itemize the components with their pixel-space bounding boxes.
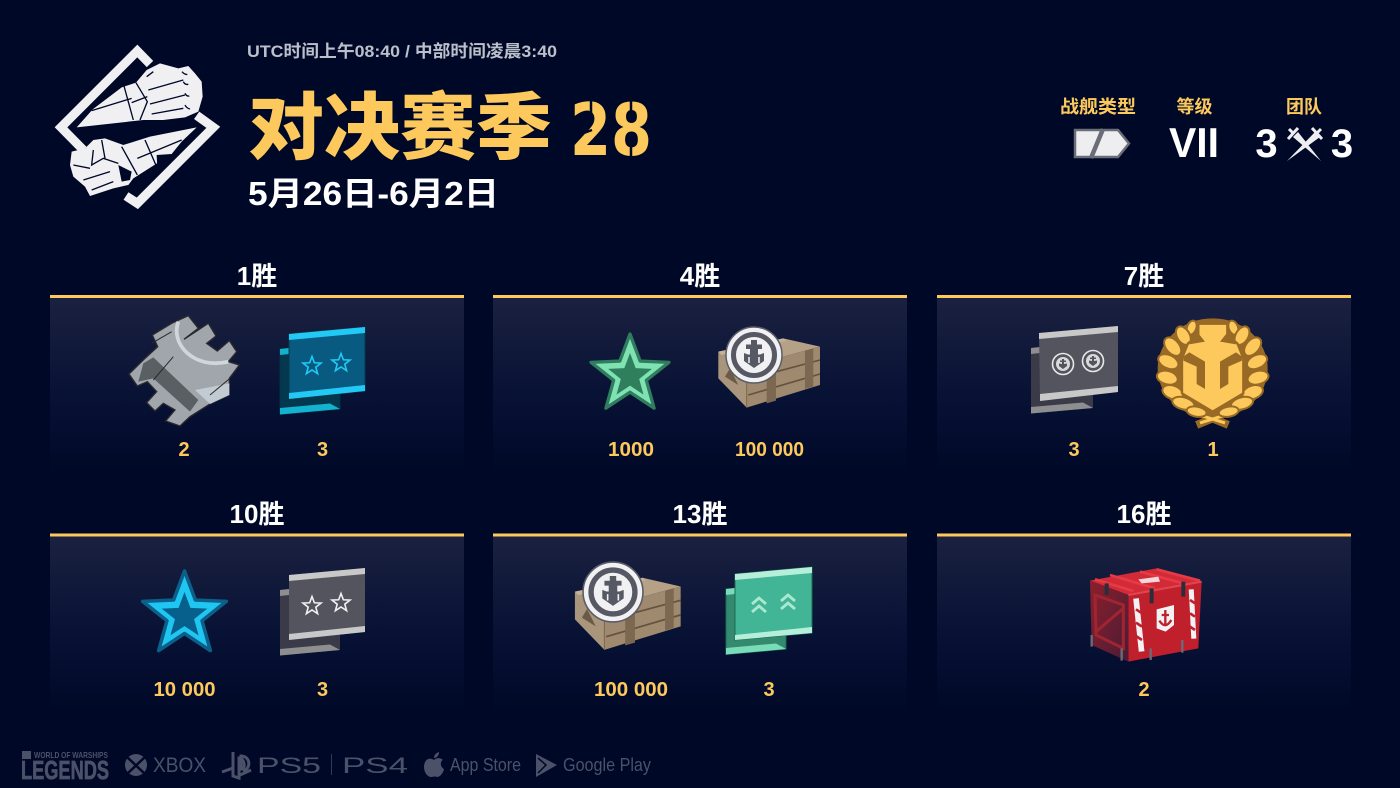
- logo: Xbox: [125, 754, 206, 777]
- panel: 7 wins: [937, 261, 1351, 476]
- icon: green star: [591, 334, 669, 408]
- reward counts: [1068, 439, 1219, 461]
- reward counts: 1000: [608, 439, 654, 461]
- reward counts: 3: [317, 439, 328, 461]
- reward counts: 3: [1068, 439, 1080, 461]
- icon: gear fragment: [129, 316, 239, 426]
- icon: teal star flag: [280, 327, 365, 414]
- ship type: 战舰类型: [1060, 97, 1136, 117]
- logo: Xbox: XBOX: [153, 754, 206, 777]
- reward counts: 100 000: [735, 439, 804, 461]
- icon: grey star flag: [280, 568, 365, 656]
- panel: 13 wins: 13胜: [673, 499, 727, 529]
- icon: green chevron flag: [726, 567, 812, 654]
- reward counts: 100 000: [594, 679, 668, 701]
- ship type: [1060, 97, 1136, 158]
- panel: 16 wins: [937, 499, 1351, 714]
- reward counts: [608, 439, 804, 461]
- tier: 等级: [1176, 96, 1212, 117]
- team size: 3: [1331, 122, 1353, 166]
- date: 5月26日-6月2日: [248, 175, 499, 212]
- panel: 7 wins: 7胜: [1124, 261, 1164, 291]
- logo: World of Warships Legends: LEGENDS: [21, 755, 109, 785]
- team size: 团队: [1286, 97, 1322, 117]
- panel: 4 wins: [493, 261, 907, 476]
- logo: World of Warships Legends: WORLD OF WARSHIPS: [34, 750, 108, 760]
- logo: PlayStation 5 and 4: PS5: [257, 753, 321, 778]
- panel: 16 wins: 16胜: [1117, 499, 1171, 529]
- reward counts: 1: [1207, 439, 1219, 461]
- reward counts: [154, 679, 328, 701]
- reward counts: 3: [763, 679, 775, 701]
- logo: Google Play: [536, 754, 651, 777]
- icon: gold laurel emblem: [1155, 318, 1270, 425]
- footer: platform logos: [21, 750, 651, 785]
- reward counts: 10 000: [154, 679, 216, 701]
- icon: red crate: [1090, 568, 1202, 662]
- time line: UTC时间上午08:40 / 中部时间凌晨3:40: [247, 41, 557, 61]
- reward count: 2: [1138, 679, 1150, 701]
- team size: 3: [1255, 122, 1278, 166]
- reward counts: [594, 679, 775, 701]
- panel: 10 wins: 10胜: [230, 499, 284, 529]
- logo: App Store: [424, 752, 521, 777]
- logo: World of Warships Legends: [21, 750, 109, 785]
- icon: wooden crate with coin: [718, 327, 820, 408]
- team size: [1255, 97, 1353, 166]
- panel: 13 wins: [493, 499, 907, 714]
- tier: [1169, 96, 1219, 166]
- logo: PlayStation 5 and 4: [222, 752, 408, 778]
- reward counts: 2: [178, 439, 190, 461]
- logo: Google Play: Google Play: [563, 755, 651, 775]
- icon: blue star: [143, 571, 226, 651]
- panel: 1 win: [50, 261, 464, 476]
- logo: App Store: App Store: [450, 755, 521, 775]
- logo: armored fists in diamond: [61, 51, 213, 203]
- logo: PlayStation 5 and 4: PS4: [342, 753, 408, 778]
- icon: grey coin flag: [1031, 326, 1118, 414]
- title: 对决赛季: [248, 69, 552, 175]
- icon: wooden crate with coin: [575, 562, 681, 650]
- panel: 4 wins: 4胜: [680, 261, 720, 291]
- panel: 10 wins: [50, 499, 464, 714]
- reward counts: 3: [317, 679, 328, 701]
- reward counts: [178, 439, 328, 461]
- title: 28: [570, 88, 652, 172]
- tier: VII: [1169, 119, 1219, 166]
- panel: 1 win: 1胜: [237, 261, 277, 291]
